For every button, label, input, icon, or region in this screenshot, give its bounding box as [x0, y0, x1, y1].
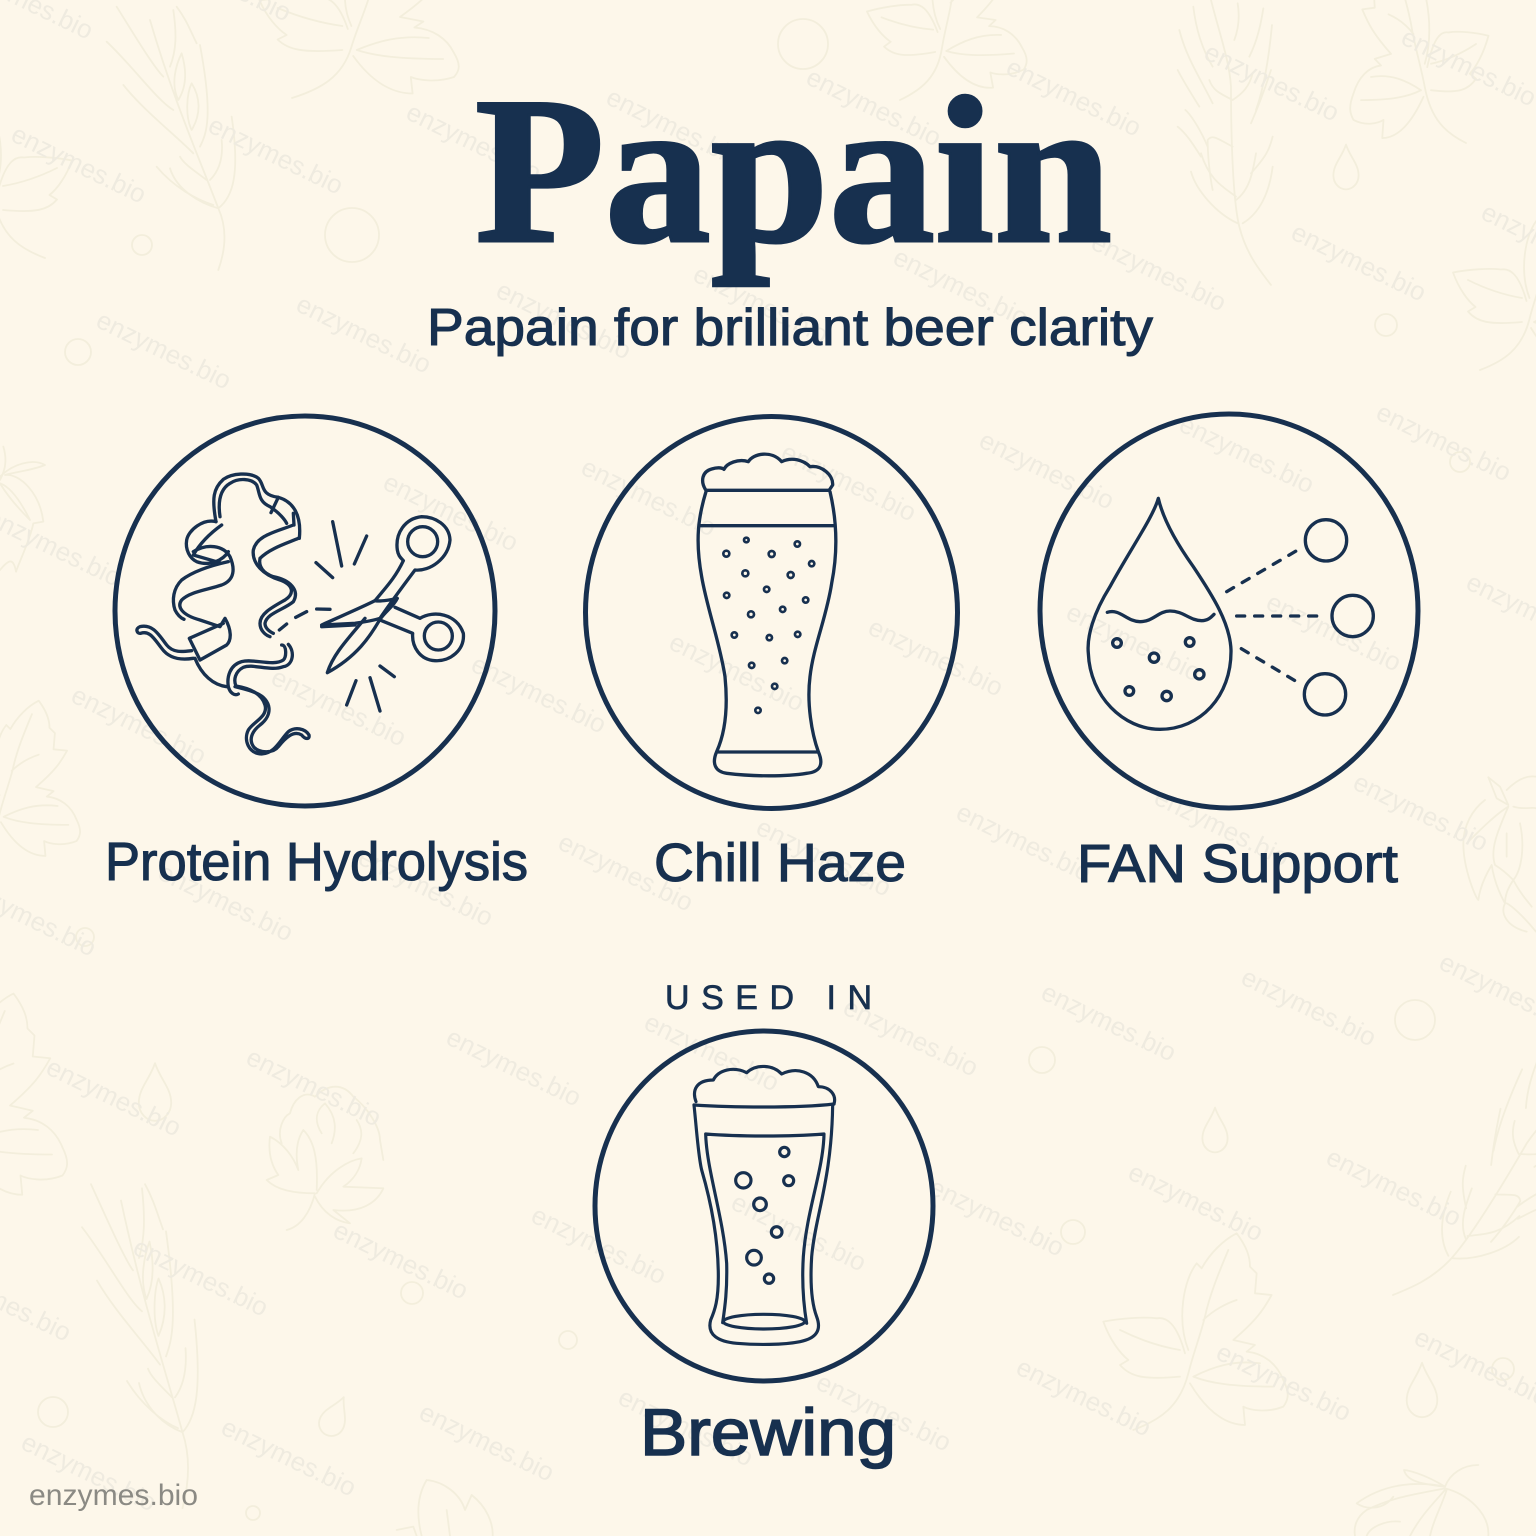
text: enzymes.bio — [1150, 781, 1294, 872]
text: enzymes.bio — [467, 648, 611, 739]
text: enzymes.bio — [154, 856, 298, 947]
text: enzymes.bio — [17, 1426, 161, 1517]
panel: protein hydrolysis icon — [115, 416, 495, 806]
title: Papain — [475, 55, 1112, 287]
text: enzymes.bio — [925, 1171, 1069, 1262]
text: enzymes.bio — [1212, 1336, 1356, 1427]
text: enzymes.bio — [1287, 216, 1431, 307]
text: enzymes.bio — [1062, 596, 1206, 687]
text: enzymes.bio — [292, 288, 436, 379]
text: enzymes.bio — [1237, 961, 1381, 1052]
text: enzymes.bio — [7, 118, 151, 209]
text: enzymes.bio — [577, 451, 721, 542]
panel: FAN support icon — [1040, 414, 1418, 808]
label: FAN support: FAN Support — [1077, 834, 1398, 894]
text: enzymes.bio — [812, 1366, 956, 1457]
text: enzymes.bio — [777, 436, 921, 527]
text: enzymes.bio — [1372, 396, 1516, 487]
text: enzymes.bio — [204, 109, 348, 200]
icon: beer glass with haze particles — [698, 454, 836, 776]
footer watermark: enzymes.bio — [29, 1479, 198, 1512]
text: enzymes.bio — [975, 424, 1119, 515]
text: enzymes.bio — [492, 274, 636, 365]
text: enzymes.bio — [402, 96, 546, 187]
text: enzymes.bio — [379, 466, 523, 557]
text: enzymes.bio — [329, 1214, 473, 1305]
heading: used in: USED IN — [665, 979, 872, 1017]
icon: protein ribbon and scissors — [137, 474, 463, 754]
text: enzymes.bio — [354, 841, 498, 932]
text: enzymes.bio — [1087, 226, 1231, 317]
text: enzymes.bio — [1322, 1141, 1466, 1232]
panel: chill haze icon — [586, 416, 958, 808]
label: brewing: Brewing — [640, 1395, 896, 1469]
label: chill haze: Chill Haze — [654, 833, 906, 893]
text: enzymes.bio — [952, 796, 1096, 887]
text: enzymes.bio — [1200, 36, 1344, 127]
text: enzymes.bio — [92, 304, 236, 395]
text: enzymes.bio — [1037, 976, 1181, 1067]
panel: brewing icon — [595, 1031, 933, 1381]
text: enzymes.bio — [442, 1021, 586, 1112]
text: enzymes.bio — [752, 811, 896, 902]
text: enzymes.bio — [602, 81, 746, 172]
text: enzymes.bio — [889, 241, 1033, 332]
text: enzymes.bio — [267, 661, 411, 752]
text: enzymes.bio — [689, 258, 833, 349]
text: enzymes.bio — [839, 991, 983, 1082]
text: enzymes.bio — [242, 1041, 386, 1132]
text: enzymes.bio — [1124, 1156, 1268, 1247]
text: enzymes.bio — [1012, 1351, 1156, 1442]
text: enzymes.bio — [527, 1199, 671, 1290]
subtitle: Papain for brilliant beer clarity — [427, 299, 1153, 357]
icon: droplet releasing nutrients — [1088, 498, 1373, 729]
text: enzymes.bio — [802, 61, 946, 152]
text: enzymes.bio — [1349, 766, 1493, 857]
text: enzymes.bio — [1175, 408, 1319, 499]
text: enzymes.bio — [727, 1186, 871, 1277]
text: enzymes.bio — [665, 626, 809, 717]
text: enzymes.bio — [217, 1411, 361, 1502]
text: enzymes.bio — [614, 1381, 758, 1472]
icon: pint glass with bubbles — [694, 1066, 835, 1344]
text: enzymes.bio — [129, 1231, 273, 1322]
text: enzymes.bio — [1262, 586, 1406, 677]
text: enzymes.bio — [1002, 51, 1146, 142]
text: enzymes.bio — [864, 611, 1008, 702]
text: enzymes.bio — [67, 679, 211, 770]
text: enzymes.bio — [415, 1396, 559, 1487]
label: protein hydrolysis: Protein Hydrolysis — [105, 832, 528, 892]
text: enzymes.bio — [554, 826, 698, 917]
text: enzymes.bio — [42, 1051, 186, 1142]
text: enzymes.bio — [640, 1006, 784, 1097]
